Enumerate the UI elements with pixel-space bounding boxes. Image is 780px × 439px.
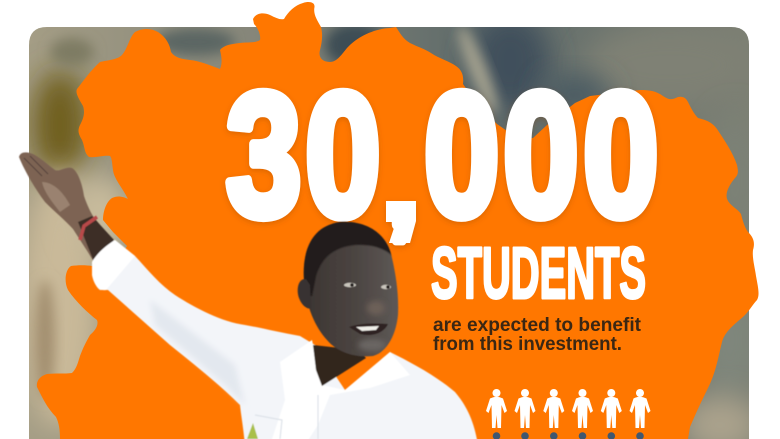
icon row: white student figures (486, 389, 650, 428)
eyes (344, 283, 356, 287)
text block: benefit statement: from this investment. (433, 334, 622, 355)
icon row: dark figures, second row (493, 432, 644, 439)
icon: student figure 4 (572, 389, 593, 428)
hand and forearm (19, 152, 112, 262)
text block: benefit statement: are expected to benefit (433, 315, 642, 336)
shirt badge (247, 423, 258, 439)
nose (367, 301, 385, 315)
icon: student figure 6 (630, 389, 650, 428)
icon: student figure 3 (543, 389, 564, 428)
head (300, 218, 402, 360)
shirt and arm (92, 240, 478, 439)
red bracelet (80, 217, 97, 240)
photo: student raising his arm (19, 152, 478, 439)
mouth (349, 323, 388, 335)
hair (303, 221, 392, 296)
ear (298, 279, 311, 309)
text block: benefit statement (433, 315, 642, 355)
headline number: 30,000: 000 (424, 57, 658, 253)
headline number: 30,000 (226, 57, 658, 253)
neck (313, 345, 366, 386)
icon: student figure 1 (486, 389, 507, 428)
headline number: 30,000: 30 (226, 57, 381, 253)
icon: student figure 5 (601, 389, 622, 428)
icon: student figure 2 (514, 389, 536, 428)
headline number: 30,000: , (390, 133, 412, 247)
